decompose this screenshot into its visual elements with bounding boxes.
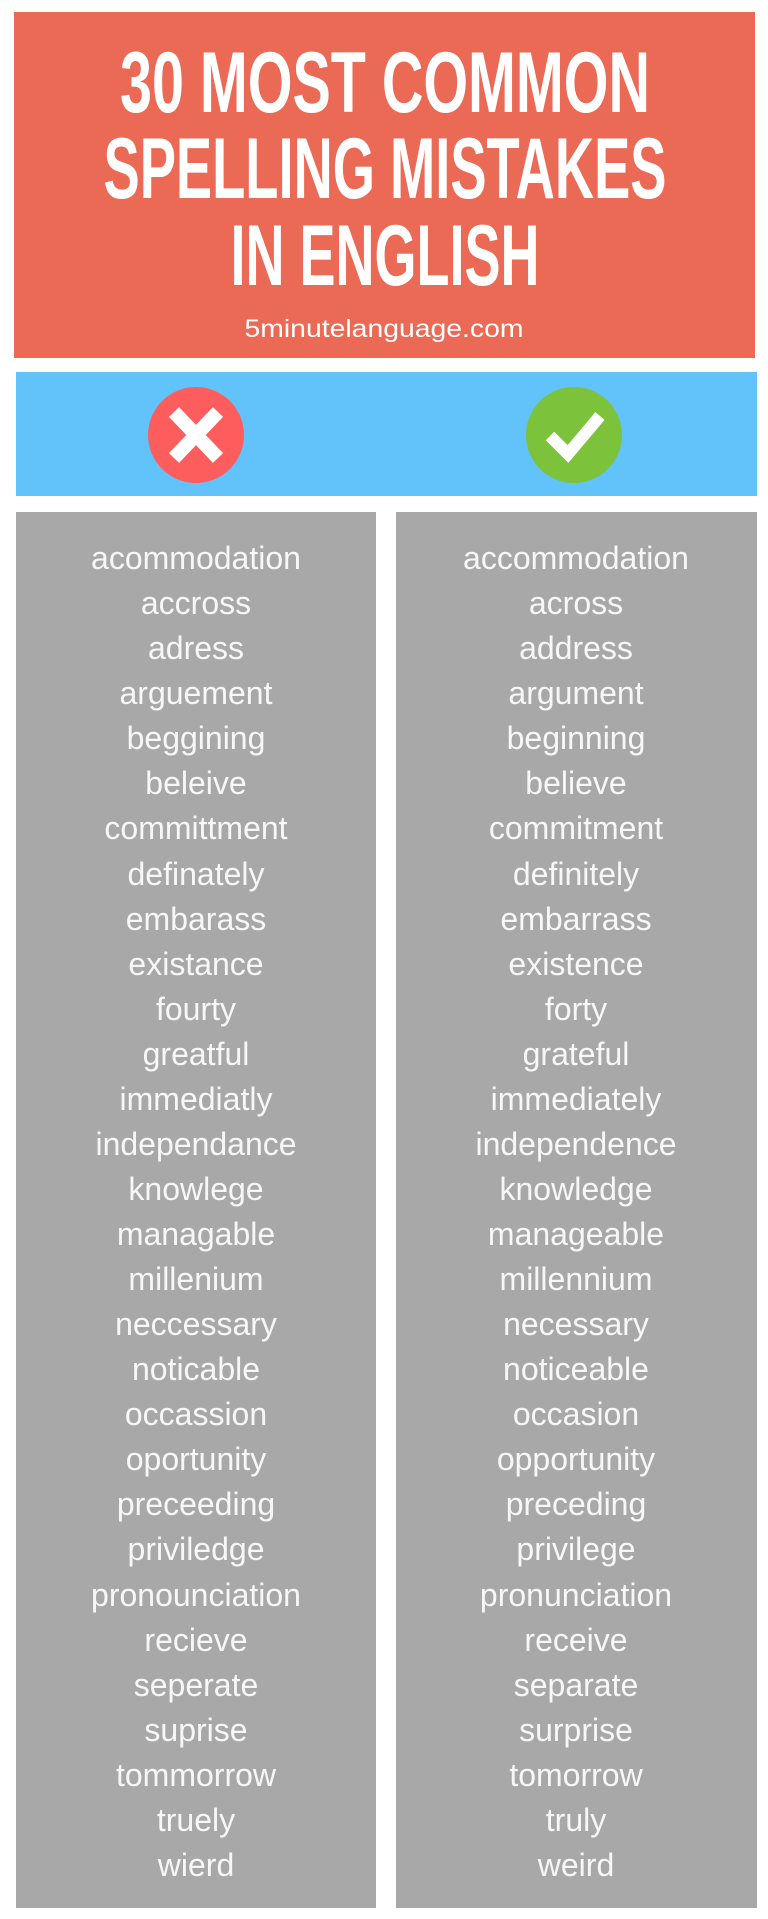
panel: misspellings: suprise <box>144 1712 248 1748</box>
panel: misspellings: embarass <box>126 901 266 937</box>
panel: correct spellings: necessary <box>503 1306 649 1342</box>
panel: misspellings: acommodation <box>91 540 301 576</box>
panel: correct spellings: privilege <box>516 1531 636 1567</box>
panel: correct spellings: separate <box>514 1667 638 1703</box>
panel: misspellings: fourty <box>156 991 236 1027</box>
panel: correct spellings: surprise <box>519 1712 633 1748</box>
panel: misspellings: adress <box>148 630 244 666</box>
panel: correct spellings: millennium <box>500 1261 652 1297</box>
panel: correct spellings: receive <box>524 1622 628 1658</box>
panel: correct spellings: knowledge <box>500 1171 652 1207</box>
panel: misspellings: truely <box>157 1802 235 1838</box>
panel: misspellings: knowlege <box>128 1171 264 1207</box>
panel: correct spellings: across <box>529 585 623 621</box>
panel: correct spellings <box>396 512 757 1908</box>
panel: correct spellings: preceding <box>506 1486 646 1522</box>
panel: misspellings: neccessary <box>115 1306 277 1342</box>
panel: misspellings <box>16 512 376 1908</box>
panel: correct spellings: truly <box>546 1802 606 1838</box>
panel: correct spellings: believe <box>525 765 627 801</box>
panel: correct spellings: existence <box>508 946 644 982</box>
title: IN ENGLISH <box>230 208 540 304</box>
panel: misspellings: priviledge <box>128 1531 264 1567</box>
panel: misspellings: recieve <box>144 1622 248 1658</box>
panel: correct spellings: opportunity <box>497 1441 655 1477</box>
icon: correct <box>526 387 622 483</box>
panel: misspellings: beleive <box>145 765 247 801</box>
panel: misspellings: wierd <box>157 1847 234 1883</box>
panel: misspellings: tommorrow <box>116 1757 277 1793</box>
panel: misspellings: occassion <box>125 1396 267 1432</box>
panel: correct spellings: independence <box>475 1126 677 1162</box>
panel: misspellings: greatful <box>143 1036 249 1072</box>
panel: correct spellings: tomorrow <box>509 1757 644 1793</box>
panel: misspellings: independance <box>95 1126 297 1162</box>
panel: correct spellings: beginning <box>507 720 645 756</box>
panel: correct spellings: noticeable <box>503 1351 649 1387</box>
subtitle: 5minutelanguage.com <box>244 315 524 343</box>
title <box>104 35 666 304</box>
panel: misspellings: committment <box>104 810 288 846</box>
panel: correct spellings: pronunciation <box>480 1577 672 1613</box>
panel: correct spellings: embarrass <box>500 901 652 937</box>
panel: correct spellings: forty <box>545 991 607 1027</box>
panel: misspellings: pronounciation <box>91 1577 301 1613</box>
panel: misspellings: arguement <box>120 675 273 711</box>
panel: misspellings: managable <box>117 1216 275 1252</box>
panel: misspellings: seperate <box>134 1667 258 1703</box>
panel: misspellings: millenium <box>128 1261 264 1297</box>
panel: correct spellings: weird <box>537 1847 614 1883</box>
icon band <box>16 372 757 496</box>
panel: misspellings: oportunity <box>126 1441 266 1477</box>
icon: wrong <box>148 387 244 483</box>
panel: correct spellings: immediately <box>491 1081 661 1117</box>
header panel <box>14 12 755 358</box>
panel: misspellings: beggining <box>127 720 265 756</box>
panel: misspellings: accross <box>141 585 251 621</box>
panel: correct spellings: argument <box>508 675 644 711</box>
panel: correct spellings: definitely <box>513 856 639 892</box>
panel: misspellings: noticable <box>132 1351 260 1387</box>
panel: misspellings: immediatly <box>120 1081 272 1117</box>
panel: misspellings: definately <box>128 856 264 892</box>
panel: misspellings: existance <box>128 946 264 982</box>
panel: correct spellings: commitment <box>489 810 663 846</box>
panel: correct spellings: accommodation <box>463 540 689 576</box>
panel: correct spellings: occasion <box>513 1396 639 1432</box>
panel: correct spellings: address <box>519 630 633 666</box>
panel: correct spellings: manageable <box>488 1216 664 1252</box>
panel: correct spellings: grateful <box>523 1036 629 1072</box>
panel: misspellings: preceeding <box>117 1486 275 1522</box>
